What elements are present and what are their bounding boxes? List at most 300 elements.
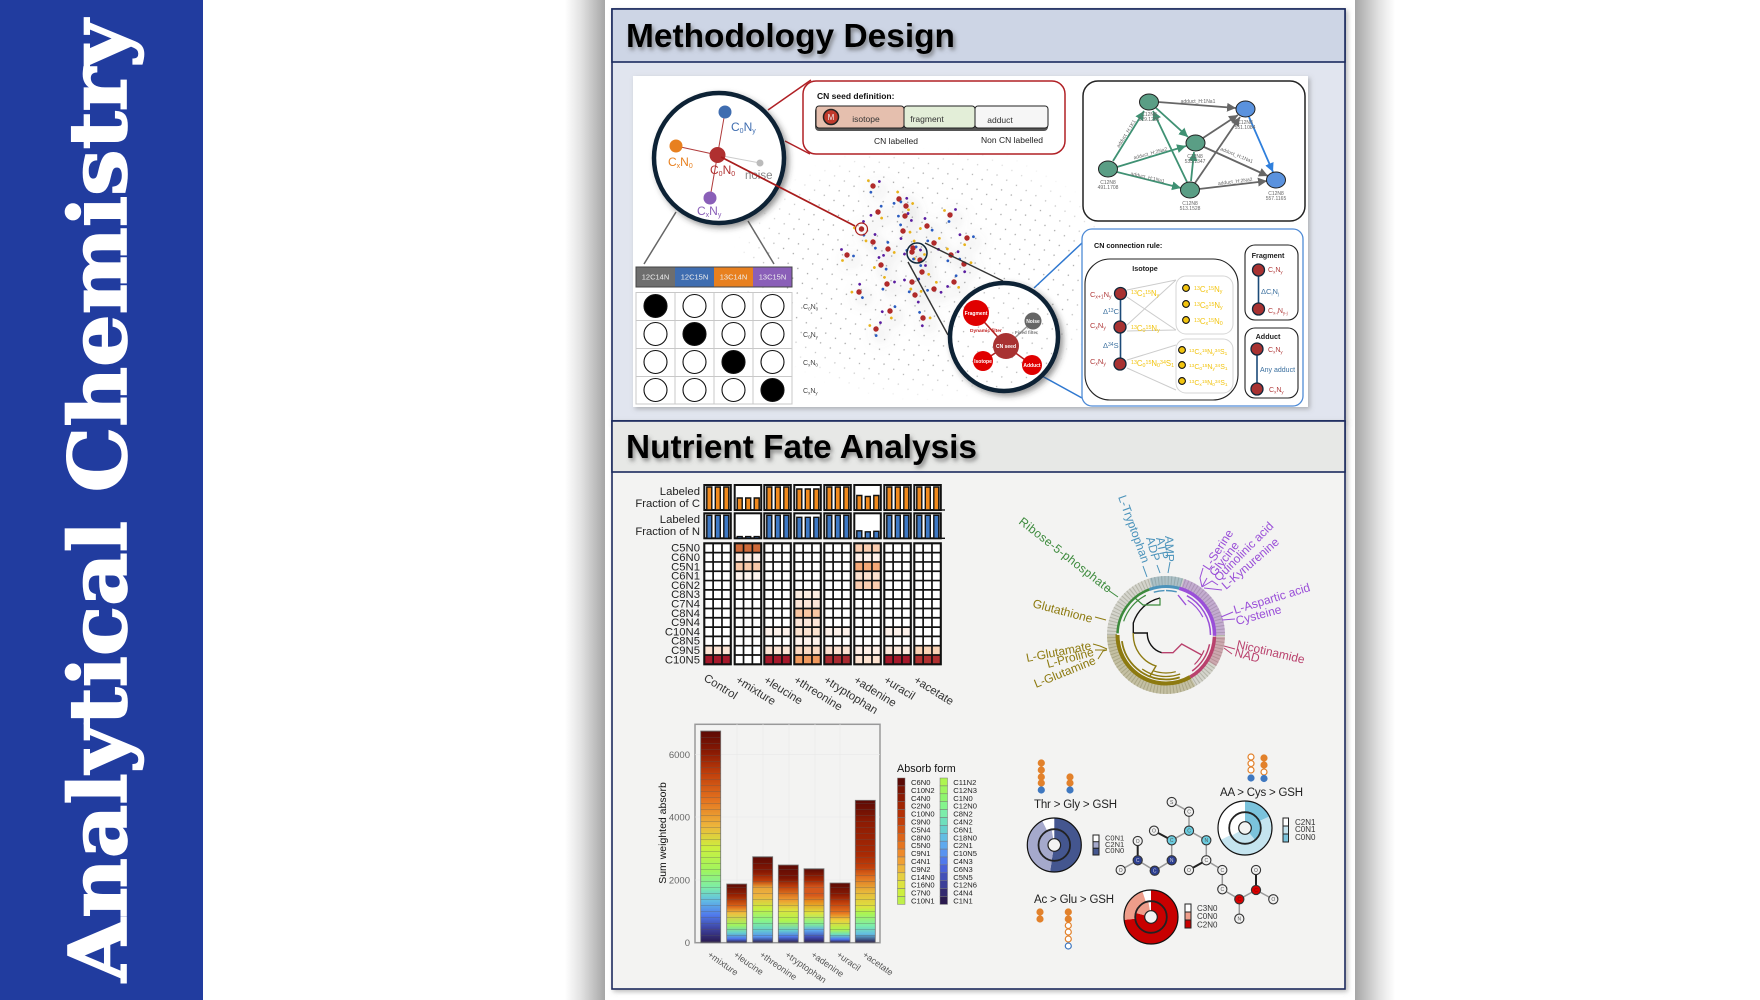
isotope rule: y	[1157, 328, 1160, 334]
callout: CN seed definition: CN labelled	[874, 136, 918, 146]
heatmap column labels: +acetate	[911, 674, 955, 708]
heatmap column labels: +mixture	[733, 674, 777, 708]
isotope rule: N	[1151, 324, 1157, 333]
isotope rule: N	[1207, 349, 1212, 356]
isotope rule: y	[1212, 352, 1215, 357]
dendrogram labels: Glutathione	[1031, 596, 1094, 626]
isotope rule: 15	[1146, 360, 1151, 366]
table header	[636, 267, 792, 287]
isotope rule: 13	[1108, 308, 1114, 314]
legend: absorb form: C5N0	[911, 841, 930, 850]
isotope rule	[1085, 259, 1238, 400]
dendrogram labels: L-Tryptophan	[1115, 493, 1153, 565]
adduct rule: N	[1276, 387, 1281, 394]
molecule bonds	[1121, 802, 1273, 919]
fragment rule: x-i	[1273, 310, 1278, 316]
isotope rule: N	[1207, 380, 1212, 387]
network labels: C12N8	[1237, 120, 1253, 126]
isotope rule: 34	[1160, 360, 1166, 366]
isotope rule: y	[1109, 294, 1112, 300]
network labels: C12N8	[1141, 112, 1157, 118]
legend: absorb form: C4N3	[953, 857, 973, 866]
pathway: Thr > Gly > GSH	[1027, 759, 1124, 872]
legend: absorb form: C7N0	[911, 889, 930, 898]
network nodes	[1098, 94, 1286, 198]
bar: +uracil	[830, 883, 850, 943]
white figure card	[633, 76, 1308, 407]
heatmap column: leucine	[764, 543, 791, 664]
molecule atoms: C	[1254, 888, 1258, 894]
x axis labels: +adenine	[809, 949, 846, 979]
isotope rule: C	[1137, 289, 1143, 298]
isotope rule: x	[1095, 326, 1098, 332]
dendrogram labels: AMP	[1162, 536, 1177, 562]
y axis ticks: 6000	[669, 750, 690, 761]
legend: absorb form: C2N1	[953, 841, 973, 850]
molecule atoms: C	[1204, 858, 1208, 864]
fragment rule: N	[1275, 267, 1280, 274]
table row labels: 0	[815, 362, 818, 368]
fragment rule: y	[1280, 270, 1283, 274]
dendrogram labels: L-Kynurenine	[1219, 535, 1282, 592]
legend: absorb form: C4N4	[953, 889, 973, 898]
y axis ticks	[669, 750, 690, 949]
heatmap row labels: C9N4	[671, 617, 700, 629]
donut chart: Ac > Glu > GSH	[1124, 890, 1178, 944]
isotope rule: x	[1095, 362, 1098, 368]
table row labels: N	[810, 388, 815, 395]
legend: absorb form: C11N2	[953, 778, 976, 787]
dendrogram labels: ATP	[1153, 536, 1171, 561]
heatmap column labels: +leucine	[761, 674, 804, 707]
legend: absorb form: C4N1	[911, 857, 930, 866]
table row labels: 0	[808, 306, 811, 312]
isotope rule: C	[1137, 324, 1143, 333]
legend: C2N1	[1105, 840, 1124, 849]
dot chains	[1036, 908, 1072, 949]
isotope rule: 13	[1189, 363, 1195, 369]
legend: absorb form: C12N6	[953, 881, 977, 890]
network labels: adduct_H:1Na1	[1181, 99, 1216, 105]
network labels: adduct_H:1Na1	[1219, 146, 1254, 165]
isotope rule: 15	[1146, 325, 1151, 331]
heatmap row labels: C8N5	[671, 636, 700, 648]
stacked bar chart	[657, 724, 977, 985]
magnifier: CN seed connections: Noise	[1026, 319, 1040, 325]
legend: absorb form: C1N1	[953, 896, 973, 906]
isotope rule: 34	[1215, 379, 1221, 385]
legend: absorb form: C4N2	[953, 818, 973, 826]
table row labels: x	[808, 362, 811, 368]
table row labels: N	[811, 332, 816, 339]
magnifier: CN seed connections: CN seed	[996, 344, 1016, 350]
plot frame	[695, 724, 880, 943]
isotope rule: 13	[1194, 302, 1200, 308]
molecule atoms: O	[1187, 868, 1191, 874]
dendrogram labels: Quinolinic acid	[1211, 519, 1276, 584]
tree arcs	[1122, 590, 1210, 680]
fragment rule: Fragment	[1252, 251, 1285, 260]
network labels: adduct_H:1K1	[1116, 119, 1138, 149]
molecule atoms: N	[1204, 838, 1208, 844]
isotope rule: x	[1206, 321, 1209, 327]
x axis labels: +tryptophan	[783, 949, 828, 985]
molecule atoms: C	[1220, 868, 1224, 874]
legend: absorb form: C8N2	[953, 810, 973, 819]
network labels: adduct_H:2Na2	[1218, 177, 1253, 187]
dendrogram labels: L-Glutamate	[1025, 639, 1093, 665]
molecule atoms: C	[1187, 810, 1191, 816]
isotope rule: 15	[1145, 290, 1151, 296]
heatmap column: threonine	[794, 543, 821, 664]
heading: nutrient fate analysis: Nutrient Fate Analysis	[626, 428, 977, 465]
network labels: 557.1165	[1266, 196, 1286, 202]
network labels: C12N8	[1268, 191, 1284, 197]
legend: C0N0	[1105, 846, 1124, 855]
scatter network	[738, 154, 1095, 396]
isotope rule: Isotope	[1132, 264, 1158, 273]
seed bar	[815, 106, 1048, 131]
isotope rule: C	[1200, 285, 1206, 294]
heatmap row labels: C9N5	[671, 645, 700, 657]
x axis labels: +leucine	[732, 949, 765, 977]
isotope rule: Δ	[1103, 307, 1108, 316]
adduct rule	[1245, 328, 1298, 398]
magnifier: CN seed neighbours: N	[709, 204, 718, 218]
heatmap row labels: C6N1	[671, 571, 700, 583]
isotope rule: 0	[1143, 328, 1146, 334]
isotope rule: 15	[1202, 363, 1208, 369]
isotope rule: 1	[1225, 351, 1228, 357]
isotope rule: y	[1212, 367, 1215, 372]
isotope rule: S	[1114, 341, 1119, 350]
dendrogram labels: NAD	[1233, 645, 1262, 666]
isotope rule: C	[1090, 290, 1095, 299]
isotope rule: C	[1194, 364, 1199, 371]
network graph card	[1083, 81, 1305, 221]
network labels: 491.1708	[1098, 185, 1119, 191]
heatmap column: uracil	[884, 543, 911, 664]
magnifier: CN seed neighbours: x	[706, 212, 710, 219]
network labels: C12N8	[1182, 201, 1198, 207]
adduct rule: Adduct	[1256, 332, 1281, 341]
molecule atoms: O	[1254, 868, 1258, 874]
heatmap row labels: C6N0	[671, 552, 700, 564]
heatmap column labels	[701, 672, 955, 717]
bar: +adenine	[804, 869, 824, 943]
legend: absorb form: C9N0	[911, 818, 930, 826]
isotope rule: 0	[1206, 305, 1209, 311]
isotope rule: 15	[1208, 286, 1214, 292]
fragment rule: N	[1278, 308, 1283, 315]
isotope rule: S	[1220, 380, 1225, 387]
heatmap column labels: Control	[701, 672, 739, 702]
isotope rule: y	[1103, 326, 1106, 332]
table row labels: C	[803, 388, 808, 395]
isotope rule: S	[1166, 359, 1171, 368]
heatmap column: Control	[704, 543, 731, 664]
dendrogram labels: Cysteine	[1234, 602, 1283, 628]
journal banner	[0, 0, 203, 1000]
legend: C2N0	[1197, 920, 1218, 930]
ring	[1112, 581, 1220, 689]
isotope rule: y	[1157, 293, 1160, 299]
isotope rule: 1	[1171, 363, 1174, 369]
bar row labels	[635, 486, 700, 538]
seed bar: fragment	[910, 114, 944, 124]
pathway: Ac > Glu > GSH	[1034, 890, 1218, 949]
isotope rule: 34	[1215, 348, 1220, 354]
heatmap row labels	[665, 543, 700, 666]
dendrogram labels: L-Proline	[1045, 645, 1095, 671]
header band: nutrient fate analysis	[612, 421, 1345, 472]
magnifier: CN seed neighbours: C	[697, 204, 706, 218]
isotope rule: N	[1098, 321, 1103, 330]
isotope rule: 0	[1199, 366, 1202, 372]
isotope rule: C	[1200, 317, 1206, 326]
table circles	[644, 294, 784, 402]
legend	[1185, 904, 1218, 930]
bar: +leucine	[727, 884, 747, 943]
heatmap column labels: +tryptophan	[821, 674, 880, 717]
x axis labels: +uracil	[835, 949, 863, 973]
fragment rule: x	[1273, 270, 1276, 274]
heatmap row labels: C10N5	[665, 654, 700, 666]
table header: 12C14N	[642, 272, 669, 282]
heatmap column labels: +adenine	[851, 674, 898, 710]
magnifier: CN seed neighbours: N	[744, 120, 752, 134]
isotope rule: N	[1104, 290, 1109, 299]
magnifier: CN seed connections: Adduct	[1023, 363, 1041, 369]
table row labels: x	[808, 390, 811, 396]
bar: +tryptophan	[778, 865, 798, 943]
magnifier: CN seed neighbours: 0	[731, 171, 735, 178]
isotope rule: 13	[1194, 286, 1200, 292]
legend: absorb form	[897, 763, 977, 906]
seed bar: adduct	[987, 115, 1013, 125]
network labels: 529.1285	[1139, 117, 1160, 123]
bar row labels: Fraction of C	[635, 498, 700, 510]
adduct rule: N	[1275, 347, 1280, 354]
isotope rule: 13	[1194, 318, 1200, 324]
molecule atoms	[1116, 797, 1278, 923]
fragment rule: y-j	[1283, 310, 1288, 316]
heatmap column labels: +uracil	[881, 674, 917, 703]
magnifier: CN seed neighbours: C	[668, 155, 677, 169]
magnifier: CN seed neighbours: C	[710, 163, 719, 177]
dendrogram labels: ADP	[1143, 535, 1163, 563]
tree branches	[1133, 595, 1202, 676]
magnifier: CN seed neighbours: N	[680, 155, 689, 169]
molecule atoms: C	[1187, 828, 1191, 834]
legend: absorb form: C5N4	[911, 825, 930, 834]
page card with side shadows	[565, 0, 1395, 1000]
labeled fraction of N bars	[704, 513, 945, 538]
isotope rule: 1	[1225, 366, 1228, 372]
legend: absorb form: C1N0	[953, 794, 973, 803]
fragment rule: C	[1268, 267, 1273, 274]
y axis ticks: 2000	[669, 876, 690, 886]
seed bar: isotope	[852, 114, 880, 124]
legend: C2N1	[1295, 818, 1316, 827]
network labels: 513.1528	[1180, 206, 1201, 212]
heatmap row labels: C6N2	[671, 580, 700, 592]
adduct rule: x	[1274, 390, 1277, 394]
legend: absorb form: C9N1	[911, 849, 930, 858]
circular dendrogram	[1016, 493, 1312, 691]
network labels: C12N8	[1100, 180, 1116, 186]
callout: CN seed definition: CN seed definition:	[817, 91, 895, 101]
molecule atoms: C	[1170, 838, 1174, 844]
isotope rule: N	[1151, 359, 1157, 368]
journal title: Analytical Chemistry	[51, 17, 145, 983]
table row labels: y	[816, 334, 819, 340]
legend: C0N0	[1295, 833, 1316, 842]
heading: methodology design: Methodology Design	[626, 17, 955, 54]
table row labels: C	[803, 332, 808, 339]
pathway: Ac > Glu > GSH: Ac > Glu > GSH	[1034, 894, 1114, 906]
header band: methodology design	[612, 9, 1345, 62]
magnifier: CN seed connections: Fragment	[965, 311, 988, 317]
magnifier: CN seed neighbours: y	[752, 128, 756, 135]
isotope rule: 0	[1212, 382, 1215, 388]
isotope rule: x	[1199, 352, 1202, 357]
adduct rule: C	[1268, 347, 1273, 354]
magnifier: CN seed connections: Isotope	[974, 359, 992, 365]
network labels: C12N8	[1187, 154, 1203, 160]
molecule atoms: O	[1136, 839, 1140, 845]
dendrogram labels	[1016, 493, 1312, 691]
isotope rule: 13	[1131, 290, 1137, 296]
network labels	[1098, 99, 1286, 212]
legend: C3N0	[1197, 904, 1218, 913]
molecule atoms: N	[1237, 916, 1241, 922]
bar row labels: Labeled	[660, 514, 700, 526]
dot chains	[1247, 754, 1268, 782]
legend: absorb form: C10N1	[911, 896, 935, 906]
magnifier: CN seed neighbours: 0	[740, 128, 744, 135]
heatmap column labels: +threonine	[791, 674, 844, 714]
isotope rule: y	[1220, 289, 1223, 295]
legend: absorb form: C2N0	[911, 802, 930, 811]
adduct rule: C	[1269, 387, 1274, 394]
isotope rule: y	[1220, 305, 1223, 311]
magnifier: CN seed neighbours: noise	[745, 170, 772, 182]
heatmap row labels: C5N1	[671, 561, 700, 573]
legend: absorb form: Absorb form	[897, 763, 956, 775]
legend	[1093, 834, 1124, 855]
fragment rule: C	[1268, 308, 1273, 315]
molecule atoms: C	[1237, 897, 1241, 903]
legend: absorb form: C10N5	[953, 849, 977, 858]
labeled fraction of C bars	[704, 485, 945, 510]
legend	[1283, 818, 1316, 842]
isotope rule: C	[1200, 301, 1206, 310]
panel: methodology design	[612, 9, 1345, 421]
legend: absorb form: C6N3	[953, 865, 973, 874]
isotope rule: 15	[1208, 318, 1214, 324]
molecule atoms: O	[1119, 868, 1123, 874]
molecule atoms: O	[1271, 897, 1275, 903]
bar: +acetate	[855, 800, 875, 943]
molecule atoms: S	[1170, 800, 1174, 806]
bar row labels: Fraction of N	[635, 526, 700, 538]
heatmap row labels: C8N3	[671, 589, 700, 601]
heatmap column: mixture	[735, 543, 761, 664]
y axis ticks: 0	[685, 938, 690, 949]
callout: CN seed definition	[768, 80, 1065, 154]
network labels: adduct_H:2Na2	[1133, 146, 1168, 161]
legend: absorb form: C4N0	[911, 794, 930, 803]
legend: absorb form: C5N5	[953, 873, 973, 882]
dendrogram labels: L-Glutamine	[1032, 653, 1098, 691]
isotope rule: C	[1090, 357, 1095, 366]
heatmap row labels: C10N4	[665, 626, 700, 638]
isotope rule: 13	[1131, 325, 1137, 331]
isotope rule: Δ	[1103, 341, 1108, 350]
legend: absorb form: C8N0	[911, 833, 930, 842]
network labels: 535.1347	[1185, 159, 1206, 165]
legend: absorb form: C18N0	[953, 833, 977, 842]
isotope rule: N	[1207, 364, 1212, 371]
dendrogram labels: L-Aspartic acid	[1232, 580, 1312, 617]
bar: +threonine	[753, 857, 773, 943]
seed bar: M	[828, 113, 835, 122]
fragment rule	[1245, 245, 1298, 320]
isotope rule: N	[1151, 289, 1157, 298]
isotope rule: C	[1114, 307, 1120, 316]
table row labels: y	[815, 390, 818, 396]
pathway: AA > Cys > GSH: AA > Cys > GSH	[1220, 787, 1303, 799]
adduct rule: y	[1281, 390, 1284, 394]
table header: 13C14N	[720, 272, 747, 282]
y axis ticks: 4000	[669, 812, 690, 824]
molecule atoms: C	[1220, 887, 1224, 893]
isotope rule: x+1	[1095, 294, 1104, 300]
pathway: Thr > Gly > GSH: Thr > Gly > GSH	[1034, 799, 1117, 811]
heatmap column: acetate	[914, 543, 941, 664]
heatmap chart	[635, 485, 955, 717]
molecule atoms: C	[1136, 858, 1140, 864]
heatmap row labels: C7N4	[671, 598, 700, 610]
table row labels	[803, 304, 819, 396]
isotope rule: 34	[1108, 342, 1114, 348]
donut chart: AA > Cys > GSH	[1218, 801, 1272, 855]
isotope rule: 0	[1220, 321, 1223, 327]
molecule atoms: C	[1153, 868, 1157, 874]
isotope rule: x	[1206, 289, 1209, 295]
isotope rule: 0	[1157, 363, 1160, 369]
table row labels: N	[811, 304, 816, 311]
isotope rule: 15	[1202, 348, 1207, 354]
dot chains	[1038, 759, 1074, 794]
adduct rule: x	[1273, 350, 1276, 354]
magnifier: CN seed neighbours: x	[677, 163, 681, 170]
dendrogram labels: L-Serine	[1200, 527, 1236, 573]
isotope rule: 1	[1143, 293, 1146, 299]
heatmap column: adenine	[854, 543, 881, 664]
magnifier: CN seed connections: Fixed filter	[1015, 330, 1038, 335]
x axis labels: +acetate	[861, 949, 895, 978]
isotope rule: S	[1220, 349, 1225, 356]
isotope rule: S	[1220, 364, 1225, 371]
isotope rule: 13	[1189, 348, 1195, 354]
legend: C0N1	[1295, 825, 1316, 834]
isotope rule: 15	[1208, 302, 1214, 308]
dendrogram labels: Nicotinamide	[1235, 637, 1306, 667]
magnifier: CN seed neighbours	[654, 93, 784, 223]
pathway: AA > Cys > GSH	[1218, 754, 1316, 855]
